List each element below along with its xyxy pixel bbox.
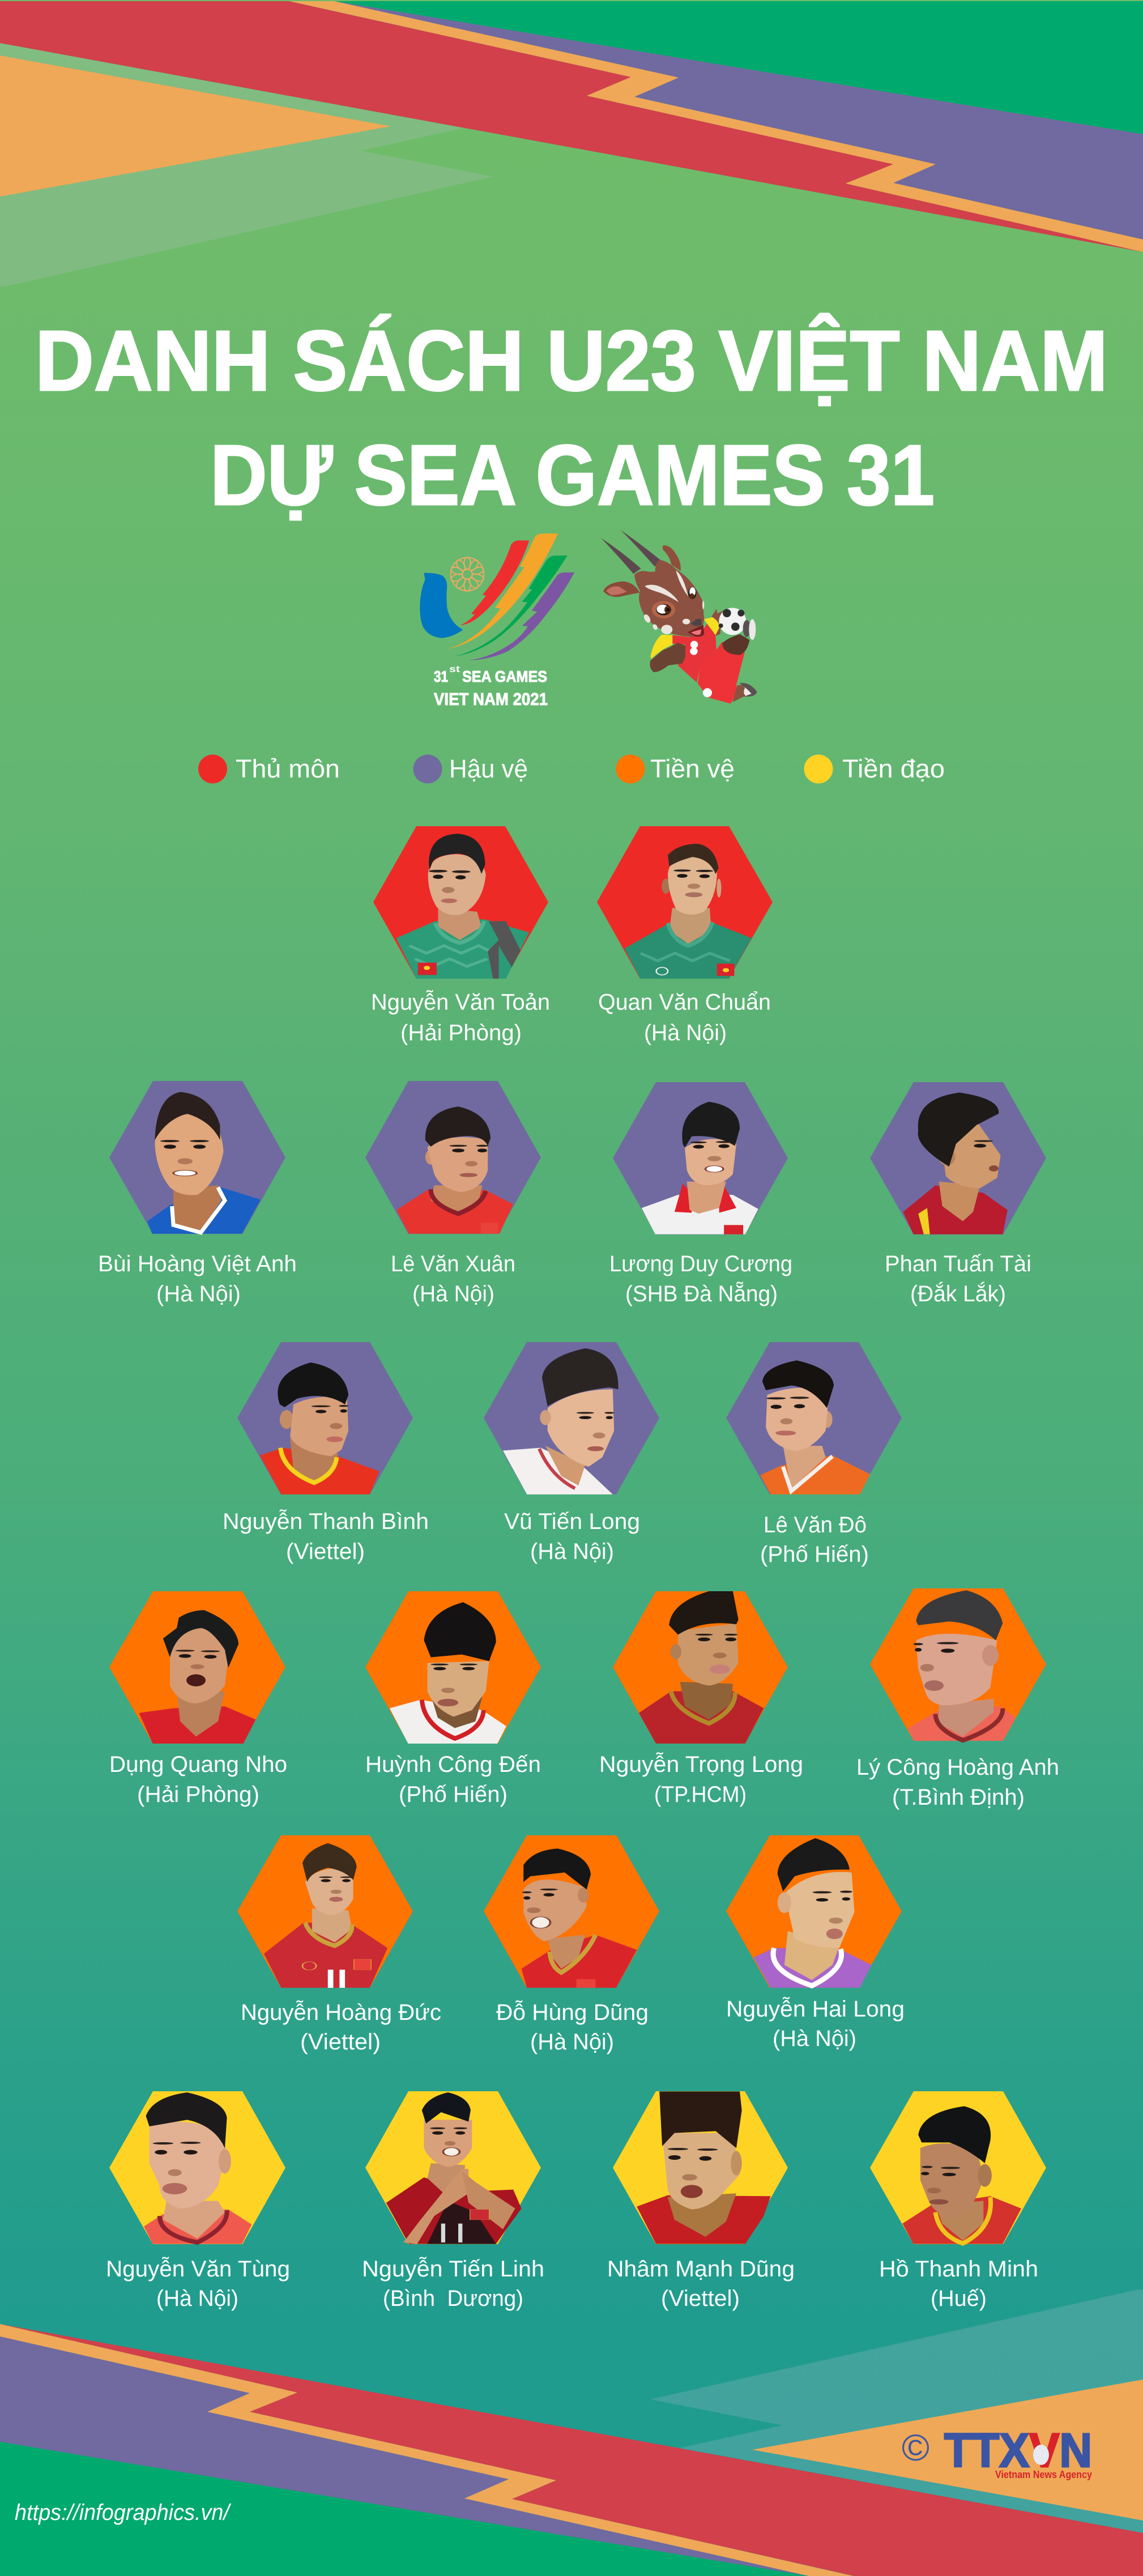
portrait	[908, 1590, 1016, 1741]
club: (Phố Hiến)	[760, 1542, 869, 1567]
player: Nhâm Mạnh Dũng	[607, 2091, 795, 2311]
source url: https://infographics.vn/	[15, 2500, 232, 2525]
club: (TP.HCM)	[654, 1782, 747, 1807]
name: Nguyễn Hoàng Đức	[241, 2000, 441, 2025]
name: Vũ Tiến Long	[504, 1509, 640, 1534]
name: Nhâm Mạnh Dũng	[607, 2257, 795, 2282]
hexagon	[597, 826, 773, 979]
club: (Đắk Lắk)	[910, 1281, 1006, 1306]
club: (Viettel)	[661, 2286, 740, 2311]
name: Lương Duy Cương	[609, 1251, 792, 1276]
legend: defender	[413, 754, 528, 784]
portrait	[260, 1362, 379, 1494]
hexagon	[109, 1591, 285, 1744]
name: Hồ Thanh Minh	[879, 2257, 1038, 2282]
portrait	[625, 844, 752, 979]
player: Đỗ Hùng Dũng	[484, 1835, 659, 2054]
hexagon	[109, 1081, 285, 1234]
legend: midfielder	[616, 754, 735, 784]
club: (Bình Dương)	[383, 2286, 523, 2311]
logo: TTXVN Vietnam News Agency: ©	[902, 2427, 929, 2468]
portrait	[390, 1602, 506, 1744]
name: Phan Tuấn Tài	[885, 1251, 1031, 1276]
portrait	[639, 1591, 764, 1744]
club: (T.Bình Định)	[892, 1785, 1025, 1810]
portrait	[264, 1843, 387, 1988]
hexagon	[726, 1835, 902, 1988]
name: Nguyễn Tiến Linh	[362, 2256, 544, 2282]
player: Hồ Thanh Minh	[870, 2091, 1046, 2311]
hexagon	[870, 1588, 1046, 1741]
club: (Hà Nội)	[156, 2286, 238, 2311]
title	[35, 313, 1108, 523]
club: (Hà Nội)	[530, 1539, 614, 1564]
portrait	[753, 1838, 872, 1988]
legend: forward: Tiền đạo	[842, 754, 945, 783]
player: Nguyễn Tiến Linh	[362, 2091, 544, 2311]
top decorative banner	[0, 1, 1143, 287]
name: Nguyễn Trọng Long	[599, 1751, 803, 1777]
portrait	[396, 834, 529, 979]
name: Lý Công Hoàng Anh	[856, 1755, 1059, 1780]
portrait	[902, 2106, 1021, 2244]
name: Lê Văn Xuân	[391, 1251, 515, 1276]
player: Quan Văn Chuẩn	[597, 826, 773, 1045]
name: Huỳnh Công Đến	[365, 1752, 541, 1777]
legend: defender: Hậu vệ	[449, 754, 528, 783]
player: Lê Văn Đô	[726, 1342, 902, 1567]
club: (Hải Phòng)	[137, 1782, 259, 1807]
hexagon	[484, 1835, 659, 1988]
logo: SEA Games 31: SEA GAMES	[462, 668, 547, 685]
player: Phan Tuấn Tài	[870, 1082, 1046, 1306]
name: Bùi Hoàng Việt Anh	[98, 1251, 297, 1276]
player: Nguyễn Hoàng Đức	[237, 1835, 441, 2054]
logo: TTXVN Vietnam News Agency: Vietnam News Agency	[995, 2469, 1092, 2480]
legend: forward	[804, 754, 945, 784]
name: Nguyễn Văn Toản	[371, 989, 550, 1015]
club: (Phố Hiến)	[399, 1782, 507, 1807]
hexagon	[365, 1591, 541, 1744]
portrait	[760, 1360, 870, 1494]
portrait	[642, 1102, 758, 1234]
portrait	[386, 2092, 522, 2244]
portrait	[139, 1610, 256, 1744]
mascot: deer with football	[601, 530, 757, 704]
club: (SHB Đà Nẵng)	[625, 1281, 778, 1306]
player: Vũ Tiến Long	[484, 1342, 659, 1564]
hexagon	[870, 2091, 1046, 2244]
name: Đỗ Hùng Dũng	[496, 2000, 649, 2025]
portrait	[637, 2091, 771, 2244]
player: Dụng Quang Nho	[109, 1591, 287, 1807]
club: (Hà Nội)	[530, 2030, 614, 2054]
name: Nguyễn Hai Long	[726, 1996, 905, 2022]
hexagon	[870, 1082, 1046, 1234]
player: Nguyễn Văn Tùng	[106, 2091, 290, 2311]
club: (Hải Phòng)	[400, 1020, 522, 1045]
hexagon	[613, 1082, 788, 1234]
club: (Hà Nội)	[156, 1281, 241, 1306]
hexagon	[365, 2091, 541, 2244]
club: (Viettel)	[286, 1539, 365, 1564]
hexagon	[613, 2091, 788, 2244]
name: Nguyễn Văn Tùng	[106, 2256, 290, 2282]
club: (Hà Nội)	[773, 2026, 856, 2051]
club: (Huế)	[931, 2286, 987, 2311]
hexagon	[109, 2091, 285, 2244]
player: Nguyễn Văn Toản	[371, 826, 550, 1045]
club: (Viettel)	[300, 2030, 381, 2054]
name: Dụng Quang Nho	[109, 1752, 287, 1777]
hexagon	[373, 826, 548, 979]
bottom decorative banner	[0, 2289, 1143, 2576]
player: Nguyễn Thanh Bình	[223, 1342, 429, 1564]
logo: SEA Games 31: 31	[434, 668, 448, 685]
portrait	[147, 1092, 261, 1234]
name: Lê Văn Đô	[764, 1513, 867, 1537]
player: Nguyễn Hai Long	[726, 1835, 905, 2051]
hexagon	[237, 1342, 413, 1494]
portrait	[144, 2092, 251, 2244]
logo: TTXVN Vietnam News Agency: TTXVN	[944, 2424, 1092, 2477]
hexagon	[613, 1591, 788, 1744]
title: DỰ SEA GAMES 31	[210, 427, 935, 523]
portrait	[503, 1348, 619, 1494]
hexagon	[726, 1342, 902, 1494]
club: (Hà Nội)	[412, 1281, 494, 1306]
club: (Hà Nội)	[644, 1020, 727, 1045]
player: Lương Duy Cương	[609, 1082, 792, 1306]
legend: midfielder: Tiền vệ	[650, 754, 735, 783]
player: Nguyễn Trọng Long	[599, 1591, 803, 1807]
legend: goalkeeper: Thủ môn	[236, 754, 340, 783]
hexagon	[484, 1342, 659, 1494]
player: Lê Văn Xuân	[365, 1081, 541, 1306]
hexagon	[237, 1835, 413, 1988]
player: Lý Công Hoàng Anh	[856, 1588, 1059, 1810]
legend	[198, 754, 945, 784]
hexagon	[365, 1081, 541, 1234]
logo: SEA Games 31	[420, 533, 574, 709]
portrait	[903, 1092, 1008, 1234]
player: Huỳnh Công Đến	[365, 1591, 541, 1807]
player: Bùi Hoàng Việt Anh	[98, 1081, 297, 1306]
logo: SEA Games 31: st	[449, 664, 460, 674]
name: Nguyễn Thanh Bình	[223, 1509, 429, 1534]
logo: SEA Games 31: VIET NAM 2021	[434, 689, 548, 709]
portrait	[522, 1848, 637, 1988]
portrait	[396, 1107, 513, 1234]
title: DANH SÁCH U23 VIỆT NAM	[35, 313, 1108, 408]
name: Quan Văn Chuẩn	[598, 990, 771, 1015]
